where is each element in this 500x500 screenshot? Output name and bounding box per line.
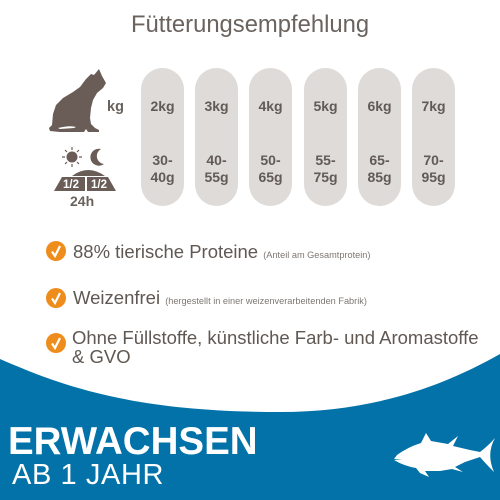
column: 7kg: 70-: [423, 152, 444, 168]
column: 4kg: [249, 68, 292, 206]
column: 5kg: 5kg: [313, 98, 338, 114]
column: 7kg: 7kg: [421, 98, 446, 114]
column: 4kg: 50-: [260, 152, 281, 168]
title: Fütterungsempfehlung: [131, 11, 369, 38]
column: 2kg: 40g: [150, 169, 175, 185]
icon: sun, moon and bowl: 1/2: [63, 179, 79, 191]
heading: ERWACHSEN: ERWACHSEN: [8, 420, 258, 463]
benefit: no fillers: & GVO: [72, 346, 131, 367]
icon: tuna fish: [394, 433, 495, 477]
benefit: no fillers: Ohne Füllstoffe, künstliche Farb- und Aromastoffe: [72, 327, 479, 348]
column: 7kg: 95g: [421, 169, 446, 185]
column: 3kg: [195, 68, 238, 206]
check icon 3: [46, 333, 66, 353]
column: 5kg: [304, 68, 347, 206]
column: 4kg: 65g: [258, 169, 283, 185]
icon: sun, moon and bowl: 1/2: [91, 179, 107, 191]
column: 5kg: 75g: [313, 169, 338, 185]
icon: sun, moon and bowl: [54, 147, 116, 191]
column: 4kg: 4kg: [258, 98, 283, 114]
icon: sitting cat: [49, 69, 106, 132]
subheading: AB 1 JAHR: AB 1 JAHR: [12, 459, 164, 491]
column: 3kg: 3kg: [204, 98, 229, 114]
column: 5kg: 55-: [315, 152, 336, 168]
check icon 2: [46, 288, 66, 308]
column: 6kg: 6kg: [367, 98, 392, 114]
benefit: wheat free: Weizenfrei (hergestellt in einer weizenverarbeitenden Fabrik): [73, 287, 367, 308]
column: 6kg: [358, 68, 401, 206]
column: 7kg: [412, 68, 455, 206]
benefit: proteins: 88% tierische Proteine (Anteil am Gesamtprotein): [73, 241, 370, 262]
benefit: no fillers: [72, 327, 479, 367]
column: 2kg: 30-: [152, 152, 173, 168]
column: 2kg: 2kg: [150, 98, 175, 114]
column: 3kg: 55g: [204, 169, 229, 185]
column: 2kg: [141, 68, 184, 206]
column: 6kg: 65-: [369, 152, 390, 168]
label: kg: kg: [107, 99, 124, 115]
check icon 1: [46, 241, 66, 261]
label: 24h: 24h: [70, 193, 94, 209]
column: 6kg: 85g: [367, 169, 392, 185]
column: 3kg: 40-: [206, 152, 227, 168]
blue curved band: [0, 354, 500, 500]
